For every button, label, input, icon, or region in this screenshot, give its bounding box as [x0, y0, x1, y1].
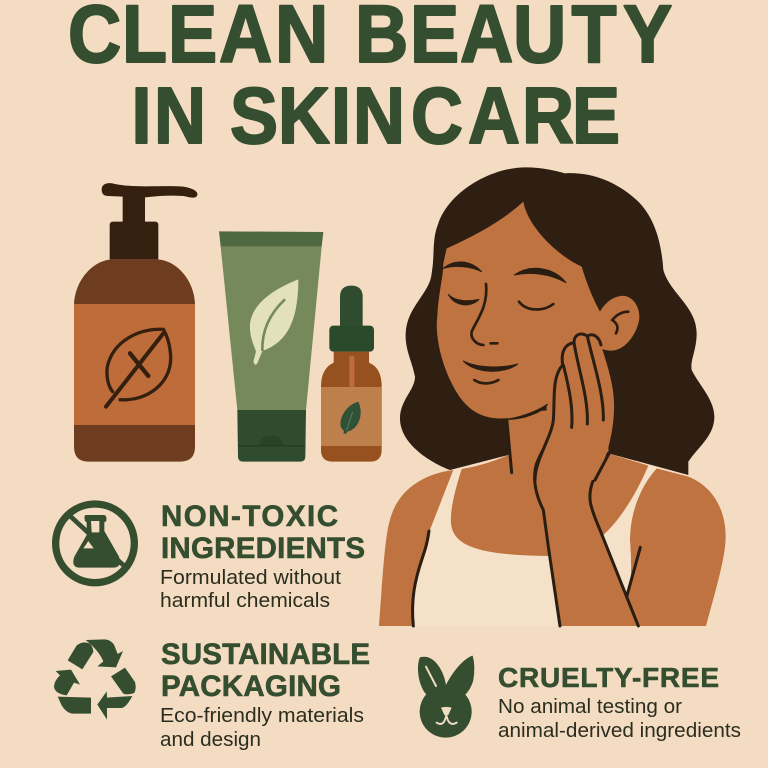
icon: no toxic chemicals: [56, 504, 134, 583]
hand on cheek: [535, 334, 614, 480]
text: cruelty-free description: animal-derived ingredients: [498, 720, 741, 742]
pump bottle: [74, 183, 197, 462]
torso and arms: [379, 410, 726, 626]
text: cruelty-free description: No animal testing or: [498, 696, 682, 718]
text: packaging description: [160, 705, 364, 751]
icon: rabbit: [418, 656, 474, 738]
text: cruelty-free description: [498, 696, 741, 742]
heading: cruelty-free: CRUELTY-FREE: [498, 662, 719, 693]
icon: recycling arrows: [54, 639, 136, 720]
text: non-toxic description: [160, 567, 341, 612]
title: IN SKINCARE: [131, 72, 620, 161]
text: non-toxic description: harmful chemicals: [160, 590, 330, 612]
heading: non-toxic ingredients: INGREDIENTS: [161, 532, 365, 565]
heading: sustainable packaging: [161, 638, 370, 703]
dropper bottle: [321, 286, 382, 462]
face: [437, 202, 639, 427]
heading: non-toxic ingredients: NON-TOXIC: [161, 500, 338, 533]
hair: [400, 167, 714, 475]
woman illustration: [379, 167, 726, 626]
heading: sustainable packaging: PACKAGING: [161, 670, 341, 703]
text: packaging description: Eco-friendly materials: [160, 705, 364, 727]
text: non-toxic description: Formulated without: [160, 567, 341, 589]
title: [68, 0, 672, 161]
text: packaging description: and design: [160, 729, 261, 751]
product group: skincare containers: [74, 183, 382, 462]
green tube: [219, 231, 323, 462]
heading: sustainable packaging: SUSTAINABLE: [161, 638, 370, 671]
heading: non-toxic ingredients: [161, 500, 365, 565]
